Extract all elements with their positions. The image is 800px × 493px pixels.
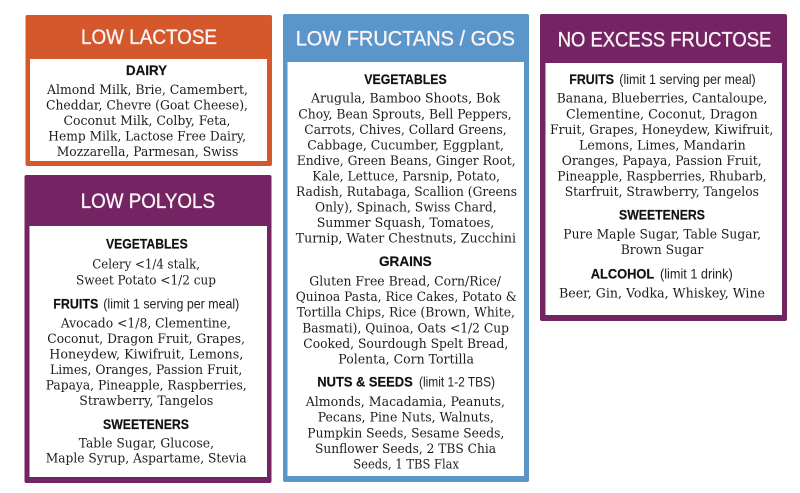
text block: dairy foods: Cheddar, Chevre (Goat Cheese), <box>46 98 248 113</box>
text block: fructan vegetables: Endive, Green Beans, Ginger Root, <box>297 154 516 169</box>
text block: fructose sweeteners <box>563 227 761 258</box>
panel: low polyols <box>24 175 272 483</box>
subheading: alcohol: (limit 1 drink) <box>660 265 733 281</box>
subheading: nuts and seeds: NUTS & SEEDS <box>317 374 413 390</box>
text block: fructan vegetables: Choy, Bean Sprouts, Bell Peppers, <box>298 107 512 122</box>
text block: fructose fruits: Oranges, Papaya, Passion Fruit, <box>562 154 762 169</box>
subheading: alcohol <box>591 265 733 281</box>
subheading: vegetables: VEGETABLES <box>106 236 188 252</box>
text block: fructan vegetables: Kale, Lettuce, Parsnip, Potato, <box>312 170 500 184</box>
text block: grains: Cooked, Sourdough Spelt Bread, <box>303 337 508 352</box>
text block: fructan vegetables: Cabbage, Cucumber, Eggplant, <box>307 138 504 153</box>
text block: alcohol: Beer, Gin, Vodka, Whiskey, Wine <box>559 287 765 302</box>
text block: fructose sweeteners: Pure Maple Sugar, Table Sugar, <box>563 227 761 242</box>
text block: fructose fruits <box>550 92 773 200</box>
text block: polyol fruits <box>46 316 247 409</box>
subheading: dairy: DAIRY <box>126 62 168 78</box>
text block: fructose fruits: Pineapple, Raspberries, Rhubarb, <box>557 170 767 184</box>
text block: nuts and seeds: Pecans, Pine Nuts, Walnuts, <box>318 411 494 426</box>
text block: polyol vegetables <box>76 258 216 288</box>
text block: fructan vegetables: Radish, Rutabaga, Scallion (Greens <box>296 185 517 200</box>
text block: dairy foods: Coconut Milk, Colby, Feta, <box>64 114 230 129</box>
text block: nuts and seeds <box>305 395 505 473</box>
text block: polyol vegetables: Sweet Potato <1/2 cup <box>76 273 216 288</box>
text block: fructose fruits: Banana, Blueberries, Cantaloupe, <box>557 92 767 107</box>
text block: polyol sweeteners: Maple Syrup, Aspartame, Stevia <box>46 452 247 467</box>
text block: grains: Gluten Free Bread, Corn/Rice/ <box>309 275 502 290</box>
text block: polyol fruits: Coconut, Dragon Fruit, Grapes, <box>47 332 245 347</box>
subheading: fruits: (limit 1 serving per meal) <box>103 295 239 311</box>
subheading: nuts and seeds <box>317 374 495 390</box>
text block: grains: Tortilla Chips, Rice (Brown, White, <box>297 306 515 321</box>
heading: no excess fructose: NO EXCESS FRUCTOSE <box>558 28 771 52</box>
text block: polyol fruits: Strawberry, Tangelos <box>79 394 213 409</box>
text block: fructose fruits: Starfruit, Strawberry, Tangelos <box>565 185 759 200</box>
text block: dairy foods: Mozzarella, Parmesan, Swiss <box>57 145 238 160</box>
text block: fructose fruits: Fruit, Grapes, Honeydew, Kiwifruit, <box>550 123 773 138</box>
text block: polyol sweeteners <box>46 436 247 467</box>
text block: fructan vegetables: Carrots, Chives, Collard Greens, <box>304 123 507 138</box>
text block: grains: Polenta, Corn Tortilla <box>338 353 474 368</box>
subheading: grains: GRAINS <box>379 253 432 269</box>
text block: polyol fruits: Papaya, Pineapple, Raspberries, <box>46 378 247 393</box>
subheading: fruits: FRUITS <box>53 295 98 311</box>
text block: fructan vegetables: Only), Spinach, Swiss Chard, <box>315 200 497 216</box>
subheading: nuts and seeds: (limit 1-2 TBS) <box>419 374 495 390</box>
text block: grains: Basmati), Quinoa, Oats <1/2 Cup <box>302 321 509 336</box>
text block: nuts and seeds: Almonds, Macadamia, Peanuts, <box>305 395 505 410</box>
text block: polyol fruits: Avocado <1/8, Clementine, <box>60 316 231 331</box>
subheading: fruits <box>53 295 239 311</box>
text block: nuts and seeds: Pumpkin Seeds, Sesame Seeds, <box>307 426 504 441</box>
subheading: sweeteners: SWEETENERS <box>103 416 189 432</box>
panel: no excess fructose <box>540 14 787 321</box>
heading: low polyols: LOW POLYOLS <box>81 189 215 213</box>
subheading: fruits <box>569 71 756 87</box>
text block: polyol vegetables: Celery <1/4 stalk, <box>92 258 200 273</box>
text block: polyol fruits: Honeydew, Kiwifruit, Lemons, <box>49 347 243 362</box>
text block: fructan vegetables <box>296 92 517 247</box>
text block: fructose fruits: Clementine, Coconut, Dragon <box>566 107 758 122</box>
subheading: fruits: (limit 1 serving per meal) <box>619 71 756 87</box>
text block: dairy foods <box>46 83 248 160</box>
text block: fructan vegetables: Summer Squash, Tomatoes, <box>317 216 494 231</box>
text block: fructan vegetables: Arugula, Bamboo Shoots, Bok <box>310 92 500 107</box>
text block: fructan vegetables: Turnip, Water Chestnuts, Zucchini <box>296 232 516 247</box>
text block: dairy foods: Almond Milk, Brie, Camembert, <box>46 83 248 98</box>
text block: grains: Quinoa Pasta, Rice Cakes, Potato & <box>296 290 517 305</box>
text block: fructose fruits: Lemons, Limes, Mandarin <box>579 138 746 154</box>
subheading: fruits: FRUITS <box>569 71 614 87</box>
text block: polyol sweeteners: Table Sugar, Glucose, <box>79 436 214 451</box>
text block: fructose sweeteners: Brown Sugar <box>621 243 704 258</box>
subheading: sweeteners: SWEETENERS <box>619 206 705 222</box>
panel: low fructans / gos <box>283 14 529 482</box>
heading: low lactose: LOW LACTOSE <box>81 25 217 49</box>
text block: grains <box>296 275 517 368</box>
text block: polyol fruits: Limes, Oranges, Passion Fruit, <box>50 363 242 378</box>
text block: dairy foods: Hemp Milk, Lactose Free Dairy, <box>48 130 246 145</box>
text block: nuts and seeds: Sunflower Seeds, 2 TBS Chia <box>315 442 496 457</box>
text block: nuts and seeds: Seeds, 1 TBS Flax <box>353 458 460 473</box>
subheading: vegetables: VEGETABLES <box>364 71 447 87</box>
subheading: alcohol: ALCOHOL <box>591 265 655 281</box>
panel: low lactose <box>26 15 272 166</box>
heading: low fructans / gos: LOW FRUCTANS / GOS <box>296 27 515 51</box>
